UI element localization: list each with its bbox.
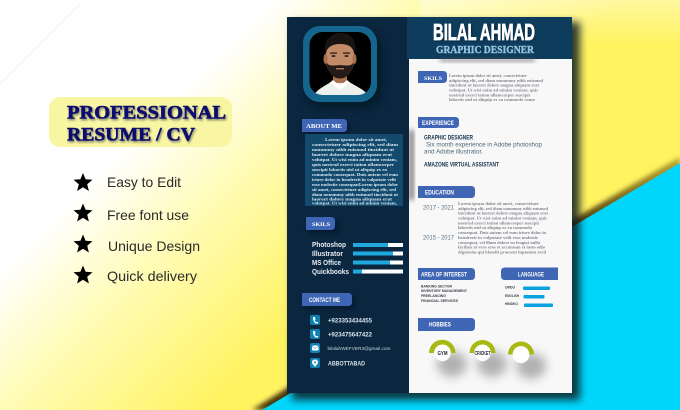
icon: phone <box>310 315 320 325</box>
section: education: consequat, vel illum dolore eu feugiat nulla <box>458 240 541 245</box>
section: about me <box>302 119 349 135</box>
section: area of interest: BANKING SECTOR <box>421 284 452 288</box>
section: education: Lorem ipsum dolor sit amet, consectetuer <box>458 201 539 206</box>
about me text box: laoreet dolore magna aliquam erat <box>312 196 393 202</box>
about me text box: iriure dolor in hendrerit in vulputate velit <box>312 177 396 182</box>
thin diagonal line top left <box>0 3 81 84</box>
section: skills summary: adipiscing elit, sed diam nonummy nibh euismod <box>449 78 543 83</box>
decorative top glow on yellow area <box>420 0 680 45</box>
section: area of interest <box>418 268 475 303</box>
skill bars: Illustrator <box>312 249 343 258</box>
card left dark column <box>287 17 409 393</box>
section: language: LANGUAGE <box>518 272 544 278</box>
section: contact me label <box>302 293 354 309</box>
icon: star 2 <box>74 204 92 222</box>
hobby: gym <box>429 340 467 377</box>
section: education: facilisis at vero eros et accumsan et iusto odio <box>458 244 546 250</box>
phone number 2: +923475647422 <box>328 332 372 338</box>
section: education: tincidunt ut laoreet dolore magna aliquam erat <box>458 210 548 216</box>
section: skills summary: lobortis nisl ut aliquip ex ea commodo conse <box>449 97 535 102</box>
skill bars: Photoshop <box>312 240 346 249</box>
left promo heading <box>49 97 232 147</box>
about me text box: Lorem ipsum dolor sit amet, <box>325 137 387 142</box>
feature list <box>74 173 200 284</box>
section: area of interest: FREELANCING <box>421 293 446 298</box>
section: education <box>418 186 548 254</box>
about me text box: diam nonummy nibh euismod tincidunt ut <box>312 192 398 197</box>
about me text box: volutpat. Ut wisi enim ad minim veniam, <box>312 200 397 206</box>
feature: easy to edit: Easy to Edit <box>107 174 181 190</box>
about me text box: esse molestie consequatLorem ipsum dolor <box>312 182 398 187</box>
skill bars: Quickbooks <box>312 267 349 276</box>
portrait illustration <box>314 33 368 95</box>
section: language: URDU <box>505 284 515 290</box>
heading text: RESUME / CV <box>67 126 196 146</box>
section: experience: Six month experience in Adobe photoshop <box>426 142 542 148</box>
about me text box: laoreet dolore magna aliquam erat <box>312 152 393 157</box>
heading shadow text <box>68 105 227 147</box>
section: experience: AMAZONE VIRTUAL ASSISTANT <box>424 162 499 168</box>
about me text box: quis nostrud exerci tation ullamcorper <box>312 162 394 167</box>
cyan diagonal shape <box>262 163 680 410</box>
icon: star 1 <box>74 173 92 191</box>
heading background pill <box>49 97 232 147</box>
feature: free font use: Free font use <box>107 207 189 223</box>
heading shadow text: PROFESSIONAL <box>68 105 227 125</box>
section: area of interest: FINANCIAL SERVICES <box>421 298 458 303</box>
resume card shadow <box>292 22 580 400</box>
section: skills sidebar label <box>306 217 338 233</box>
icon: phone <box>310 329 320 339</box>
resume card <box>287 17 572 393</box>
about me text box: nonummy nibh euismod tincidunt ut <box>312 147 395 152</box>
name: BILAL AHMAD <box>434 20 536 46</box>
section: education: lobortis nisl ut aliquip ex ea commodo <box>458 225 533 230</box>
about me text box: volutpat. Ut wisi enim ad minim veniam, <box>312 157 397 162</box>
about me text box: consectetuer adipiscing elit, sed diam <box>312 142 398 147</box>
section: language: HINDKO <box>505 301 518 306</box>
skill bars <box>312 240 403 276</box>
feature: quick delivery: Quick delivery <box>107 268 197 284</box>
job title: GRAPHIC DESIGNER <box>436 44 535 56</box>
hobby: cricket: CRICKET <box>474 351 490 357</box>
section: contact me label: CONTACT ME <box>309 297 340 304</box>
feature: unique design: Unique Design <box>108 238 200 254</box>
section: about me: ABOUT ME <box>306 124 342 130</box>
contact details <box>310 315 390 368</box>
name <box>433 19 536 46</box>
section: experience: GRAPHIC DESIGNER <box>424 134 473 142</box>
section: education: volutpat. Ut wisi enim ad minim veniam, quis <box>458 216 547 220</box>
section: skills summary: Lorem ipsum dolor sit amet, consectetuer <box>449 73 527 78</box>
hobby: blank <box>508 342 546 379</box>
section: education: adipiscing elit, sed diam nonummy nibh euismod <box>458 206 548 211</box>
section: education: dignissim qui blandit praesent luptatum zzril <box>458 250 547 254</box>
section: skills summary: tincidunt ut laoreet dolore magna aliquam erat <box>449 82 539 88</box>
section: skills summary <box>418 71 543 102</box>
about me text box: commodo consequat. Duis autem vel eum <box>312 172 398 177</box>
section: experience: and Adobe illustrator. <box>424 148 483 156</box>
section: experience <box>418 117 542 168</box>
section: education: consequat. Duis autem vel eum iriure dolor in <box>458 230 546 235</box>
header band <box>407 17 572 59</box>
section: education: EDUCATION <box>425 190 454 196</box>
heading shadow text: RESUME / CV <box>68 127 197 147</box>
section: hobbies label <box>418 318 475 331</box>
section: education: nostrud exerci tation ullamcorper suscipit <box>458 220 539 226</box>
section: skills summary: nostrud exerci tation ullamcorper suscipit <box>449 92 530 98</box>
inner shadow along the panel left edge <box>409 130 414 200</box>
hobby: cricket <box>470 340 507 377</box>
section: skills summary: SKILS <box>424 76 442 82</box>
skill bars: MS Office <box>312 258 341 267</box>
section: area of interest: AREA OF INTEREST <box>421 272 467 278</box>
photo frame <box>303 26 382 107</box>
section: education: hendrerit in vulputate velit esse molestie <box>458 235 538 240</box>
section: area of interest: INVENTORY MANAGEMENT <box>421 288 468 293</box>
shadow of the cyan shape <box>252 157 680 410</box>
icon: star 4 <box>74 266 92 284</box>
icon: location pin <box>310 358 320 368</box>
section: skills summary: volutpat. Ut wisi enim ad minim veniam, quis <box>449 88 538 92</box>
section: skills sidebar label: SKILS <box>312 222 330 228</box>
section: experience: EXPERIENCE <box>422 120 455 127</box>
heading text <box>67 104 226 146</box>
heading text: PROFESSIONAL <box>67 104 226 124</box>
section: hobbies label: HOBBIES <box>429 322 451 328</box>
name: BILAL AHMAD <box>433 19 535 45</box>
icon: star 3 <box>74 234 92 252</box>
section: language <box>501 268 558 307</box>
section: language: ENGLISH <box>505 293 519 298</box>
white content panel <box>409 59 572 393</box>
shadow below the header <box>440 58 535 62</box>
section: education: 2015 - 2017 <box>423 234 454 242</box>
icon: mail <box>310 343 320 353</box>
about me text box: suscipit lobortis nisl ut aliquip ex ea <box>312 167 388 172</box>
about me text box <box>305 134 403 206</box>
phone number 1: +923353434455 <box>328 318 372 324</box>
section: education: 2017 - 2021 <box>423 204 454 212</box>
location: ABBOTTABAD <box>328 362 366 368</box>
hobby: gym: GYM <box>438 351 448 357</box>
email address: bilalahWEFVER3@gmail.com <box>328 346 390 352</box>
about me text box: sit amet, consectetuer adipiscing elit, sed <box>312 187 396 192</box>
